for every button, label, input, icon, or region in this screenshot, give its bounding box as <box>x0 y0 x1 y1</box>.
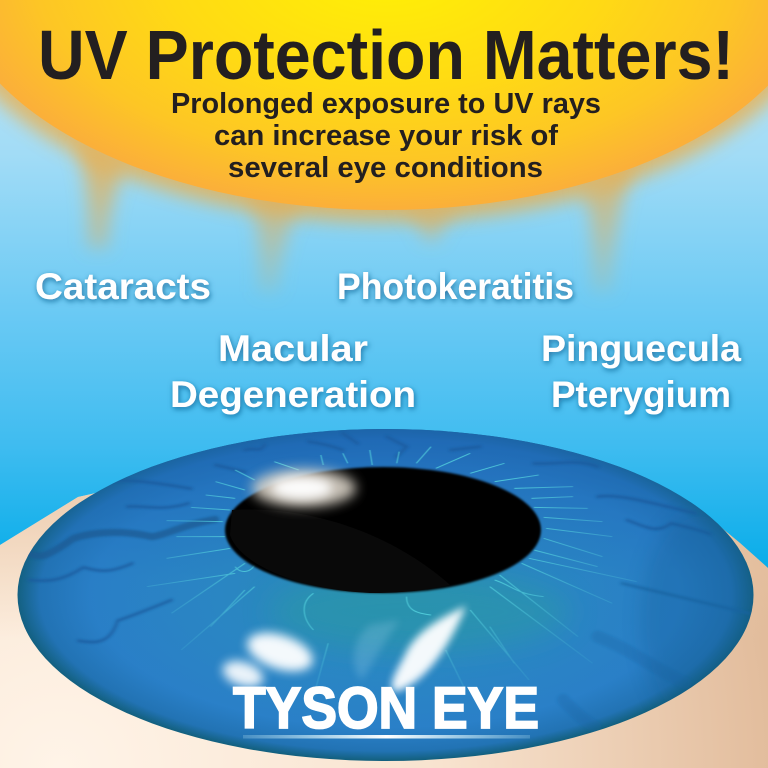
logo underline <box>243 735 530 738</box>
light reflection streak <box>392 606 466 692</box>
iris veins <box>29 433 749 727</box>
label: Pinguecula Pterygium: Pinguecula <box>541 328 741 369</box>
right shadow <box>640 521 754 704</box>
lower teal haze <box>282 582 563 648</box>
sun <box>0 0 768 210</box>
label: Cataracts: Cataracts <box>35 266 211 307</box>
eye <box>18 429 760 761</box>
light reflection small blob <box>219 656 267 692</box>
label: Macular Degeneration <box>170 328 416 415</box>
sun rays <box>0 0 768 292</box>
subtitle: several eye conditions <box>228 152 543 184</box>
iris <box>18 429 754 761</box>
skin around the eye <box>0 470 768 768</box>
label: Macular Degeneration: Macular <box>218 328 368 369</box>
subtitle: can increase your risk of <box>214 120 558 152</box>
condition labels <box>35 266 741 415</box>
subtitle: Prolonged exposure to UV rays <box>171 88 601 120</box>
pupil reflection <box>230 510 450 593</box>
label: Pinguecula Pterygium: Pterygium <box>551 374 731 415</box>
glare core <box>272 477 332 499</box>
pale streak <box>354 620 400 680</box>
subtitle <box>171 88 601 184</box>
glare halo on iris top <box>252 469 356 507</box>
label: Macular Degeneration: Degeneration <box>170 374 416 415</box>
iris fibres <box>147 447 637 697</box>
logo: Tyson Eye: TYSON EYE <box>233 676 539 741</box>
label: Pinguecula Pterygium <box>541 328 741 415</box>
label: Photokeratitis: Photokeratitis <box>337 266 574 307</box>
pupil <box>225 467 541 593</box>
light reflection blob <box>242 625 318 679</box>
